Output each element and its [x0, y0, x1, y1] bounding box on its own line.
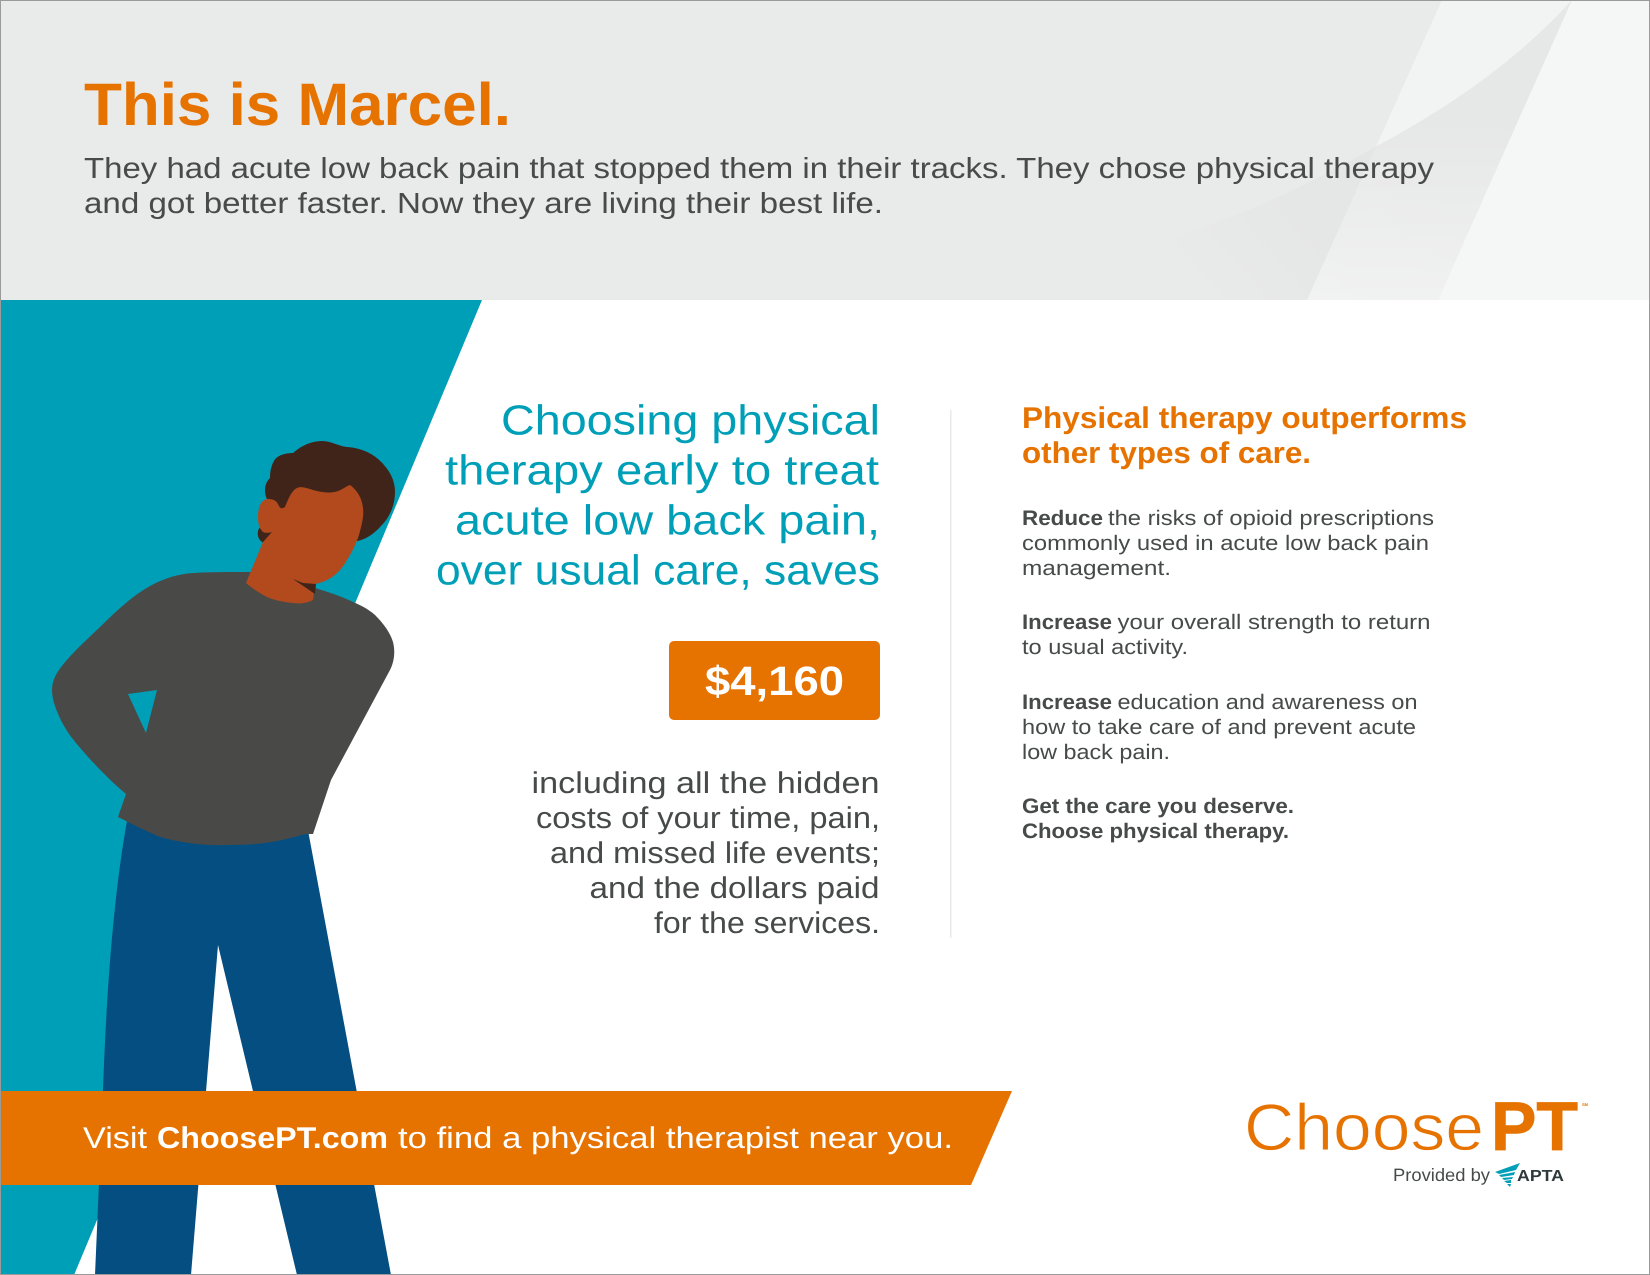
- text block: hidden costs: [532, 767, 880, 940]
- text block: hidden costs: costs of your time, pain,: [536, 802, 880, 835]
- face and neck: [246, 485, 363, 603]
- heading: physical therapy outperforms: other types of care.: [1022, 437, 1311, 470]
- footer banner: to find a physical therapist near you.: [398, 1122, 953, 1155]
- call to action text: [1022, 795, 1294, 843]
- heading: physical therapy outperforms: [1022, 402, 1467, 470]
- logo: ChoosePT: PT: [1491, 1088, 1578, 1165]
- logo: provided by APTA: Provided by: [1393, 1165, 1490, 1185]
- logo: provided by APTA: APTA: [1517, 1168, 1564, 1185]
- pants: [95, 815, 391, 1275]
- logo: ChoosePT: Choose: [1244, 1090, 1484, 1164]
- benefit: increase education: education and awareness on: [1118, 691, 1418, 714]
- benefit: increase strength: your overall strength to return: [1118, 611, 1430, 634]
- sweater: [52, 572, 394, 845]
- icon: APTA wing: [1495, 1163, 1520, 1187]
- hair: [258, 441, 395, 560]
- text block: hidden costs: and the dollars paid: [590, 872, 880, 905]
- panel: header background: [0, 0, 1650, 300]
- heading: choosing physical therapy: over usual care, saves: [436, 546, 880, 594]
- chin shadow: [293, 579, 316, 594]
- benefit: reduce opioid risks: the risks of opioid prescriptions: [1108, 507, 1434, 530]
- footer banner: [0, 1091, 1012, 1185]
- benefit: increase strength: to usual activity.: [1022, 636, 1188, 659]
- heading: choosing physical therapy: acute low back pain,: [455, 496, 880, 544]
- benefit: increase education: how to take care of and prevent acute: [1022, 716, 1416, 739]
- savings badge: $4,160: [669, 641, 880, 720]
- savings badge: $4,160: $4,160: [705, 658, 844, 704]
- footer banner: Visit: [83, 1122, 148, 1155]
- call to action text: Get the care you deserve.: [1022, 795, 1294, 818]
- heading: choosing physical therapy: Choosing physical: [501, 396, 880, 444]
- teal angled background panel: [0, 300, 482, 1275]
- text block: hidden costs: for the services.: [654, 907, 880, 940]
- benefit: increase education: Increase: [1022, 691, 1112, 714]
- logo: provided by APTA: [1393, 1163, 1564, 1187]
- footer banner: ChoosePT.com: [157, 1122, 388, 1155]
- benefit: reduce opioid risks: management.: [1022, 557, 1171, 580]
- logo: ChoosePT: [1244, 1088, 1589, 1165]
- text block: hidden costs: and missed life events;: [550, 837, 880, 870]
- header description: [84, 153, 1435, 220]
- benefit: increase strength: Increase: [1022, 611, 1112, 634]
- benefit: reduce opioid risks: [1022, 507, 1434, 580]
- header description: and got better faster. Now they are living their best life.: [84, 188, 883, 220]
- header description: They had acute low back pain that stopped them in their tracks. They chose physical therapy: [84, 153, 1435, 185]
- vertical divider: [950, 410, 952, 938]
- heading: physical therapy outperforms: Physical therapy outperforms: [1022, 402, 1467, 435]
- benefit: increase strength: [1022, 611, 1430, 659]
- benefit: reduce opioid risks: Reduce: [1022, 507, 1103, 530]
- heading: choosing physical therapy: therapy early to treat: [445, 446, 879, 494]
- benefit: reduce opioid risks: commonly used in acute low back pain: [1022, 532, 1429, 555]
- benefit: increase education: low back pain.: [1022, 741, 1170, 764]
- title: This is Marcel.: [84, 71, 511, 138]
- text block: hidden costs: including all the hidden: [532, 767, 880, 800]
- benefit: increase education: [1022, 691, 1418, 764]
- call to action text: Choose physical therapy.: [1022, 820, 1289, 843]
- logo: ChoosePT: SM: [1582, 1102, 1589, 1107]
- illustration: Marcel standing with hand on back: [52, 441, 395, 1275]
- heading: choosing physical therapy: [436, 396, 880, 594]
